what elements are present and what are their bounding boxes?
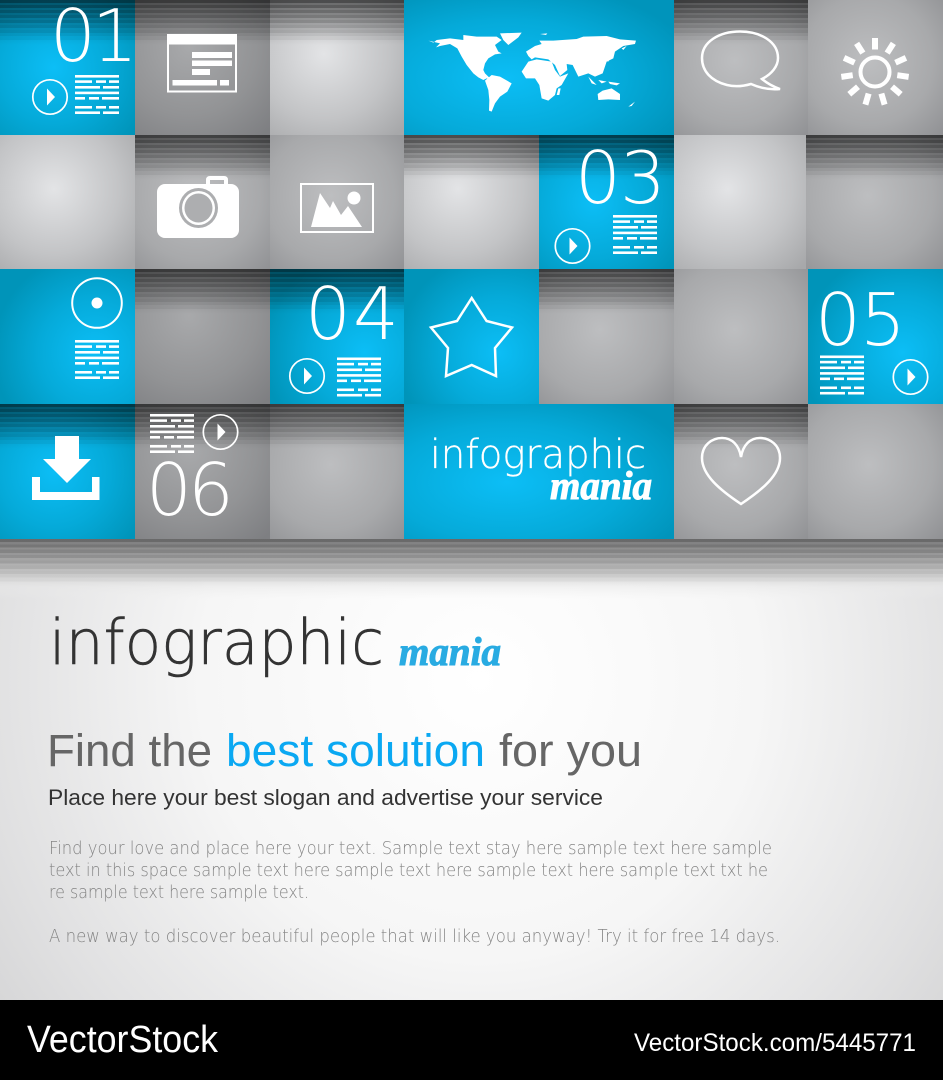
heading: mania: mania	[399, 629, 501, 674]
tile: download icon	[0, 404, 135, 539]
headline: best solution	[226, 725, 485, 776]
heading: infographic: infographic	[49, 606, 384, 679]
footer bar	[0, 1000, 943, 1080]
tile: infographic mania logo: mania	[550, 463, 652, 508]
body text: A new way to discover beautiful people that will like you anyway! Try it for free 14 days.	[49, 926, 780, 947]
tile: number 06	[135, 404, 270, 539]
tile: number 05: 0	[815, 278, 861, 362]
tile: heart icon	[674, 404, 809, 539]
tile: number 06: 0	[146, 448, 192, 532]
tile: number 01	[0, 0, 138, 135]
tile: browser window icon	[135, 0, 270, 135]
body text	[49, 838, 780, 947]
tile: blank grey	[808, 404, 943, 539]
tile: infographic mania logo	[404, 404, 674, 539]
tile: camera icon	[135, 135, 270, 270]
tile: sun icon	[808, 0, 943, 135]
tile: blank light striped	[270, 0, 405, 135]
tile: infographic mania logo: infographic	[430, 432, 646, 478]
panel: tile grid	[0, 0, 943, 539]
tile: blank grey striped	[806, 135, 943, 270]
tile: number 03: 3	[620, 136, 666, 220]
tile: number 05: 5	[860, 278, 906, 362]
tile: number 04	[270, 269, 405, 404]
tile: blank grey striped	[270, 404, 405, 539]
tile: speech bubble icon	[674, 0, 809, 135]
body text: re sample text here sample text.	[49, 882, 309, 903]
tile: number 06: 6	[188, 448, 234, 532]
body text: text in this space sample text here sample text here sample text here sample text txt he	[49, 860, 768, 881]
tile: number 05	[808, 269, 943, 404]
headline: Find the	[47, 725, 212, 776]
headline: for you	[499, 725, 642, 776]
tile: number 04: 0	[305, 272, 351, 356]
tile: world map	[404, 0, 674, 135]
footer url: VectorStock.com/5445771	[634, 1029, 916, 1057]
slogan: Place here your best slogan and advertise your service	[48, 785, 603, 810]
tile: picture icon	[270, 135, 405, 270]
tile: blank dark striped	[135, 269, 270, 404]
tile: star icon	[404, 269, 539, 404]
body text: Find your love and place here your text. Sample text stay here sample text here sample	[49, 838, 772, 859]
tile: blank light striped	[404, 135, 539, 270]
panel: lower text area	[0, 539, 943, 1000]
tile: number 03: 0	[575, 136, 621, 220]
footer brand: VectorStock	[27, 1019, 219, 1061]
headline	[47, 725, 642, 776]
tile: blank grey striped	[539, 269, 674, 404]
tile: number 04: 4	[353, 272, 399, 356]
tile: blank light	[0, 135, 135, 270]
tile: target icon	[0, 269, 135, 404]
tile: number 03	[539, 135, 674, 270]
tile: blank grey	[674, 269, 808, 404]
tile: blank light	[674, 135, 808, 270]
